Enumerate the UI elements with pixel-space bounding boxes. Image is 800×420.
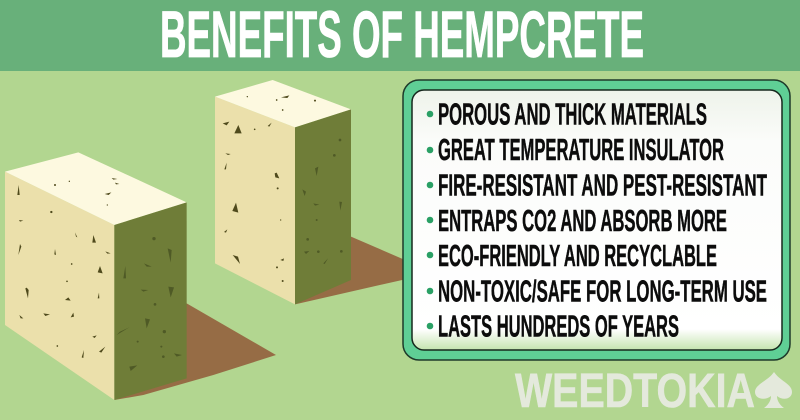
watermark logo: WEEDTOKIA <box>515 365 755 418</box>
panel frame <box>403 80 790 360</box>
icon: spade <box>755 372 792 408</box>
header band <box>0 0 800 71</box>
benefit 7 <box>427 308 679 344</box>
panel inner card <box>412 90 782 350</box>
panel: benefits list <box>403 80 790 360</box>
illustration: front hempcrete block <box>5 152 276 400</box>
illustration: back hempcrete block <box>215 80 405 304</box>
